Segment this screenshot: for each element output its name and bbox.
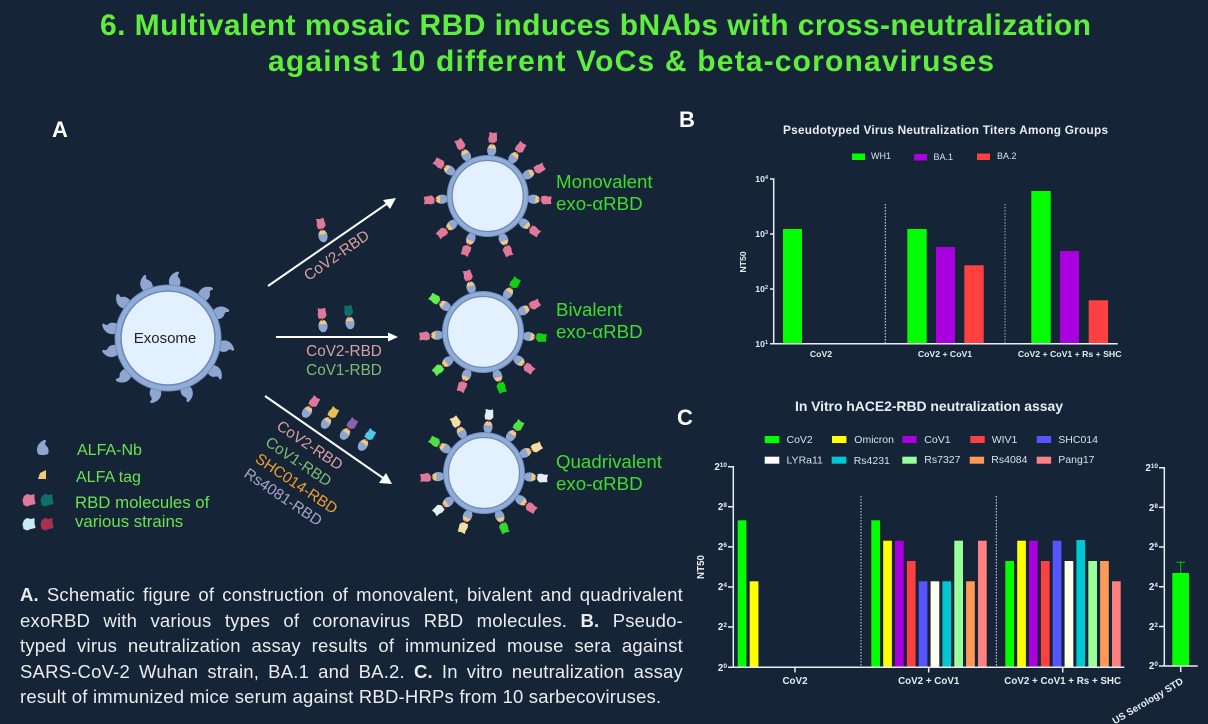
- side chart: US Serology STD: 0: [1154, 661, 1158, 668]
- chart B axes: 10: [755, 174, 765, 184]
- chart B axes: 10: [755, 339, 765, 349]
- chart C axes: 2: [718, 502, 723, 513]
- arrow: to bivalent: CoV1-RBD: [306, 362, 382, 379]
- chart B axes: [738, 174, 1122, 359]
- chart C axes: [696, 462, 1124, 687]
- title: against 10 different VoCs & beta-coronaviruses: [268, 45, 994, 78]
- side chart: US Serology STD: 10: [1151, 463, 1158, 470]
- chart C title: In Vitro hACE2-RBD neutralization assay: [795, 398, 1063, 414]
- side chart: US Serology STD: 2: [1145, 463, 1151, 474]
- arrow: to bivalent: CoV2-RBD: [306, 343, 382, 360]
- chart C bars: CoV2: [738, 520, 758, 667]
- chart B axes: CoV2 + CoV1 + Rs + SHC: [1018, 349, 1122, 359]
- monovalent exosome: Monovalent: [556, 171, 653, 192]
- chart B axes: 10: [755, 284, 765, 294]
- chart C legend: SHC014: [1058, 434, 1098, 446]
- title: 6. Multivalent mosaic RBD induces bNAbs with cross-neutralization: [100, 9, 1091, 42]
- side chart: US Serology STD: 8: [1154, 503, 1158, 510]
- arrow: to quadrivalent: Rs4081-RBD: [241, 465, 325, 530]
- side chart: US Serology STD: 2: [1149, 622, 1154, 633]
- arrow: to monovalent: CoV2-RBD: [301, 227, 373, 284]
- side chart: US Serology STD: 2: [1149, 582, 1154, 593]
- chart C axes: 4: [723, 582, 727, 589]
- chart B axes: NT50: [738, 251, 748, 273]
- chart C axes: 6: [723, 542, 727, 549]
- chart C axes: 2: [723, 622, 727, 629]
- arrow: to quadrivalent: CoV1-RBD: [262, 434, 334, 490]
- quadrivalent exosome: exo-αRBD: [556, 473, 643, 494]
- caption text block: A. Schematic figure of construction of monovalent, bivalent and quadrivalent: [20, 584, 683, 605]
- chart C legend: Omicron: [854, 434, 894, 446]
- chart C axes: CoV2: [782, 676, 808, 687]
- bivalent exosome: [419, 269, 643, 394]
- side chart: US Serology STD: 2: [1149, 503, 1154, 514]
- side chart: US Serology STD: 4: [1154, 582, 1158, 589]
- side chart: US Serology STD: [1111, 463, 1198, 724]
- arrow: to bivalent: [276, 305, 398, 379]
- quadrivalent exosome: [420, 409, 663, 535]
- arrow: to monovalent: [268, 198, 396, 286]
- bivalent exosome: exo-αRBD: [556, 321, 643, 342]
- chart B legend: WH1: [871, 151, 891, 161]
- chart C axes: NT50: [696, 554, 707, 579]
- chart C legend: Pang17: [1058, 454, 1095, 466]
- side chart: US Serology STD: 2: [1149, 661, 1154, 672]
- caption text block: [20, 584, 683, 707]
- chart B title: Pseudotyped Virus Neutralization Titers Among Groups: [783, 123, 1108, 137]
- panel C: hACE2-RBD neutralization chart: [677, 398, 1198, 724]
- side chart: US Serology STD: 2: [1149, 542, 1154, 553]
- panel A: exosome schematic: [22, 117, 663, 535]
- exosome with ALFA-Nb: Exosome: [134, 330, 196, 347]
- chart C axes: 2: [718, 622, 723, 633]
- chart C axes: 2: [718, 542, 723, 553]
- chart B axes: CoV2 + CoV1: [918, 349, 972, 359]
- chart C legend: CoV1: [924, 434, 951, 446]
- chart C legend: CoV2: [786, 434, 813, 446]
- side chart: US Serology STD: 6: [1154, 542, 1158, 549]
- panel B: pseudovirus bar chart: [679, 107, 1122, 359]
- chart C bars: CoV2 + CoV1: [871, 520, 987, 667]
- chart B axes: 10: [755, 229, 765, 239]
- monovalent exosome: [424, 132, 653, 258]
- chart C axes: 8: [723, 502, 727, 509]
- chart C legend: [765, 434, 1098, 467]
- chart B axes: CoV2: [810, 349, 832, 359]
- chart C bars: CoV2 + CoV1 + Rs + SHC: [1005, 540, 1121, 667]
- chart B bars: [783, 191, 1108, 344]
- chart C legend: Rs4084: [991, 454, 1028, 466]
- chart B axes: 2: [765, 285, 768, 291]
- chart C legend: LYRa11: [786, 454, 823, 466]
- chart B legend: BA.2: [997, 151, 1017, 161]
- arrow: to quadrivalent: SHC014-RBD: [252, 450, 340, 518]
- chart C axes: 2: [714, 462, 720, 473]
- chart B axes: 1: [765, 340, 768, 346]
- arrow: to quadrivalent: CoV2-RBD: [273, 418, 346, 474]
- chart C axes: 2: [718, 582, 723, 593]
- chart B axes: 3: [765, 230, 768, 236]
- caption text block: SARS-CoV-2 Wuhan strain, BA.1 and BA.2. C. In vitro neutralization assay: [20, 661, 683, 682]
- legend: RBD molecules of: [75, 493, 210, 512]
- legend: ALFA tag: [76, 469, 141, 486]
- chart B axes: 4: [765, 175, 769, 181]
- monovalent exosome: exo-αRBD: [556, 193, 643, 214]
- panel letter B: B: [679, 107, 695, 132]
- chart C legend: Rs4231: [854, 455, 890, 467]
- chart C axes: 10: [720, 462, 727, 469]
- caption text block: exoRBD with various types of coronavirus RBD molecules. B. Pseudo-: [20, 610, 683, 631]
- bivalent exosome: Bivalent: [556, 299, 623, 320]
- chart C legend: Rs7327: [924, 454, 961, 466]
- chart C legend: WIV1: [992, 434, 1018, 446]
- exosome with ALFA-Nb: [101, 271, 235, 405]
- panel letter C: C: [677, 405, 693, 430]
- quadrivalent exosome: Quadrivalent: [556, 451, 663, 472]
- chart C axes: 2: [718, 663, 723, 674]
- chart C axes: CoV2 + CoV1 + Rs + SHC: [1004, 676, 1121, 687]
- arrow: to quadrivalent: [241, 395, 392, 530]
- chart B legend: [852, 151, 1017, 162]
- chart C axes: 0: [723, 663, 727, 670]
- side chart: US Serology STD: 2: [1154, 622, 1158, 629]
- legend: [22, 440, 210, 531]
- caption text block: result of immunized mice serum against RBD-HRPs from 10 sarbecoviruses.: [20, 686, 661, 707]
- title: [100, 9, 1091, 78]
- chart C axes: CoV2 + CoV1: [898, 676, 960, 687]
- legend: ALFA-Nb: [77, 442, 142, 459]
- panel letter A: A: [52, 117, 68, 142]
- caption text block: typed virus neutralization assay results of immunized mouse sera against: [20, 635, 683, 656]
- legend: various strains: [75, 512, 183, 531]
- chart B legend: BA.1: [934, 152, 953, 162]
